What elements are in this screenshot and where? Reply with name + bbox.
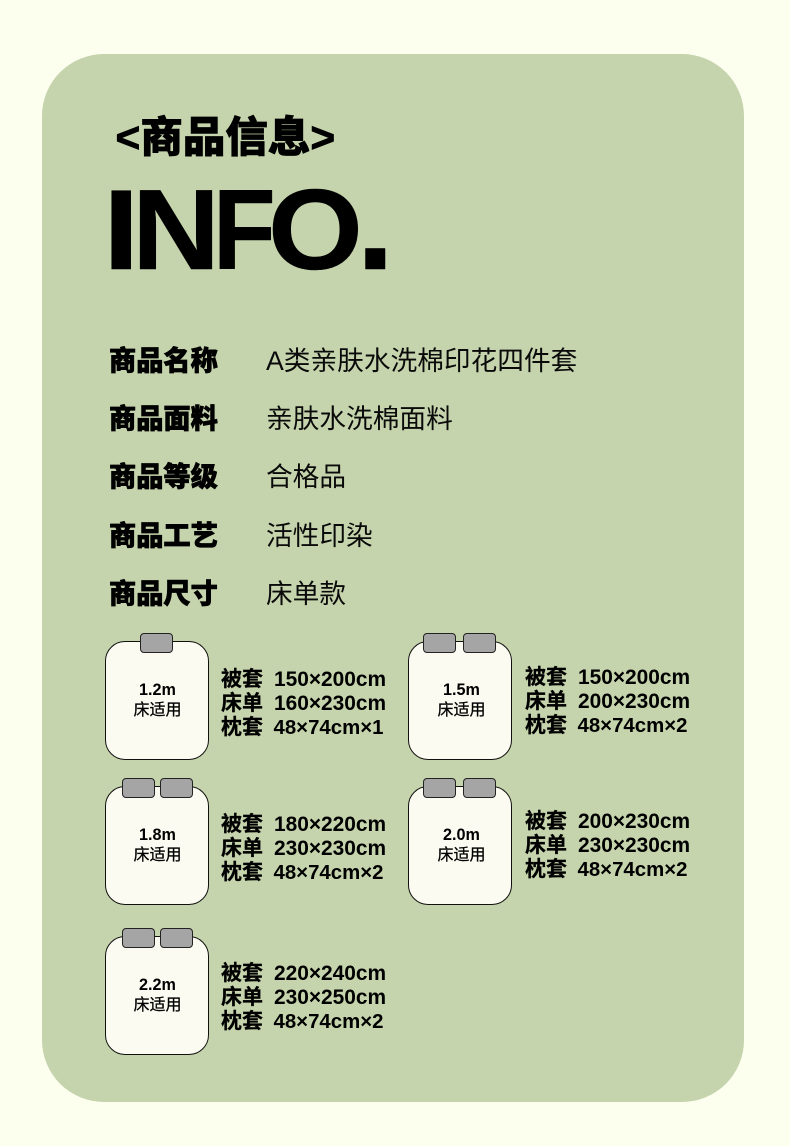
value: size: 床单款 [266,579,346,609]
size list: 1.8m: 枕套 [221,861,263,884]
bed diagram: 1.2m: 床适用 [133,702,182,719]
size list: 1.8m: 48×74cm×2 [274,862,384,884]
bed diagram: 1.8m: 1.8m [139,826,176,844]
size list: 2.2m: 被套 [221,962,263,985]
label: craft: 商品工艺 [109,520,218,551]
heading: INFO.: . [356,144,394,298]
size list: 1.2m: 枕套 [221,716,263,739]
heading: INFO. [103,144,394,298]
bed diagram: 1.5m: 床适用 [437,702,486,719]
size list: 2.2m: 床单 [221,986,263,1009]
size list: 2.0m: 48×74cm×2 [578,859,688,881]
size list: 1.8m: 180×220cm [274,813,386,836]
value: grade: 合格品 [266,462,346,492]
size list: 2.2m: 48×74cm×2 [274,1011,384,1033]
bed diagram: 1.2m: 1.2m [139,681,176,699]
size list: 1.5m: 枕套 [525,714,567,737]
bed diagram: 2.0m: 床适用 [437,847,486,864]
size list: 1.5m: 48×74cm×2 [578,715,688,737]
bed diagram: 2.2m: 2.2m [139,976,176,994]
value: craft: 活性印染 [266,521,373,551]
size list: 2.0m: 200×230cm [578,810,690,833]
label: fabric: 商品面料 [109,403,218,434]
bed diagram: 2.2m: 床适用 [133,997,182,1014]
size list: 2.2m: 枕套 [221,1010,263,1033]
size list: 2.2m: 230×250cm [274,986,386,1009]
size list: 1.8m: 被套 [221,813,263,836]
heading: INFO.: O [268,166,363,294]
size list: 1.5m: 被套 [525,666,567,689]
bed diagram: 1.8m: 床适用 [133,847,182,864]
label: grade: 商品等级 [109,461,218,492]
size list: 1.5m: 150×200cm [578,666,690,689]
size list: 2.2m [221,962,386,1033]
size list: 1.2m [221,668,386,739]
size list: 1.8m [221,812,386,884]
bed diagram: 2.2m [105,928,209,1055]
bed diagram: 2.0m: 2.0m [443,826,480,844]
size list: 1.5m: 200×230cm [578,690,690,713]
size list: 2.0m: 被套 [525,810,567,833]
size list: 2.0m: 枕套 [525,858,567,881]
size list: 1.2m: 150×200cm [274,668,386,691]
size list: 2.0m: 230×230cm [578,834,690,857]
size list: 1.2m: 被套 [221,668,263,691]
size list: 1.5m: 床单 [525,690,567,713]
size list: 1.2m: 160×230cm [274,692,386,715]
size list: 1.2m: 床单 [221,692,263,715]
bed diagram: 1.5m [408,633,512,760]
bed diagram: 1.5m: 1.5m [443,681,480,699]
size list: 1.5m [525,666,690,737]
bed diagram: 1.2m [105,633,209,760]
heading: INFO.: F [213,166,275,294]
size list: 1.8m: 230×230cm [274,837,386,860]
value: fabric: 亲肤水洗棉面料 [266,404,453,434]
label: size: 商品尺寸 [109,578,218,609]
size list: 1.2m: 48×74cm×1 [274,717,384,739]
heading: INFO.: N [132,166,220,294]
size list: 2.2m: 220×240cm [274,962,386,985]
value: product name: A类亲肤水洗棉印花四件套 [266,346,577,376]
heading: 商品信息: <商品信息> [116,115,335,162]
size list: 1.8m: 床单 [221,837,263,860]
size list: 2.0m [525,810,690,881]
label: product name: 商品名称 [109,345,218,376]
bed diagram: 2.0m [408,778,512,905]
heading: INFO.: I [103,166,140,294]
bed diagram: 1.8m [105,778,209,905]
size list: 2.0m: 床单 [525,834,567,857]
